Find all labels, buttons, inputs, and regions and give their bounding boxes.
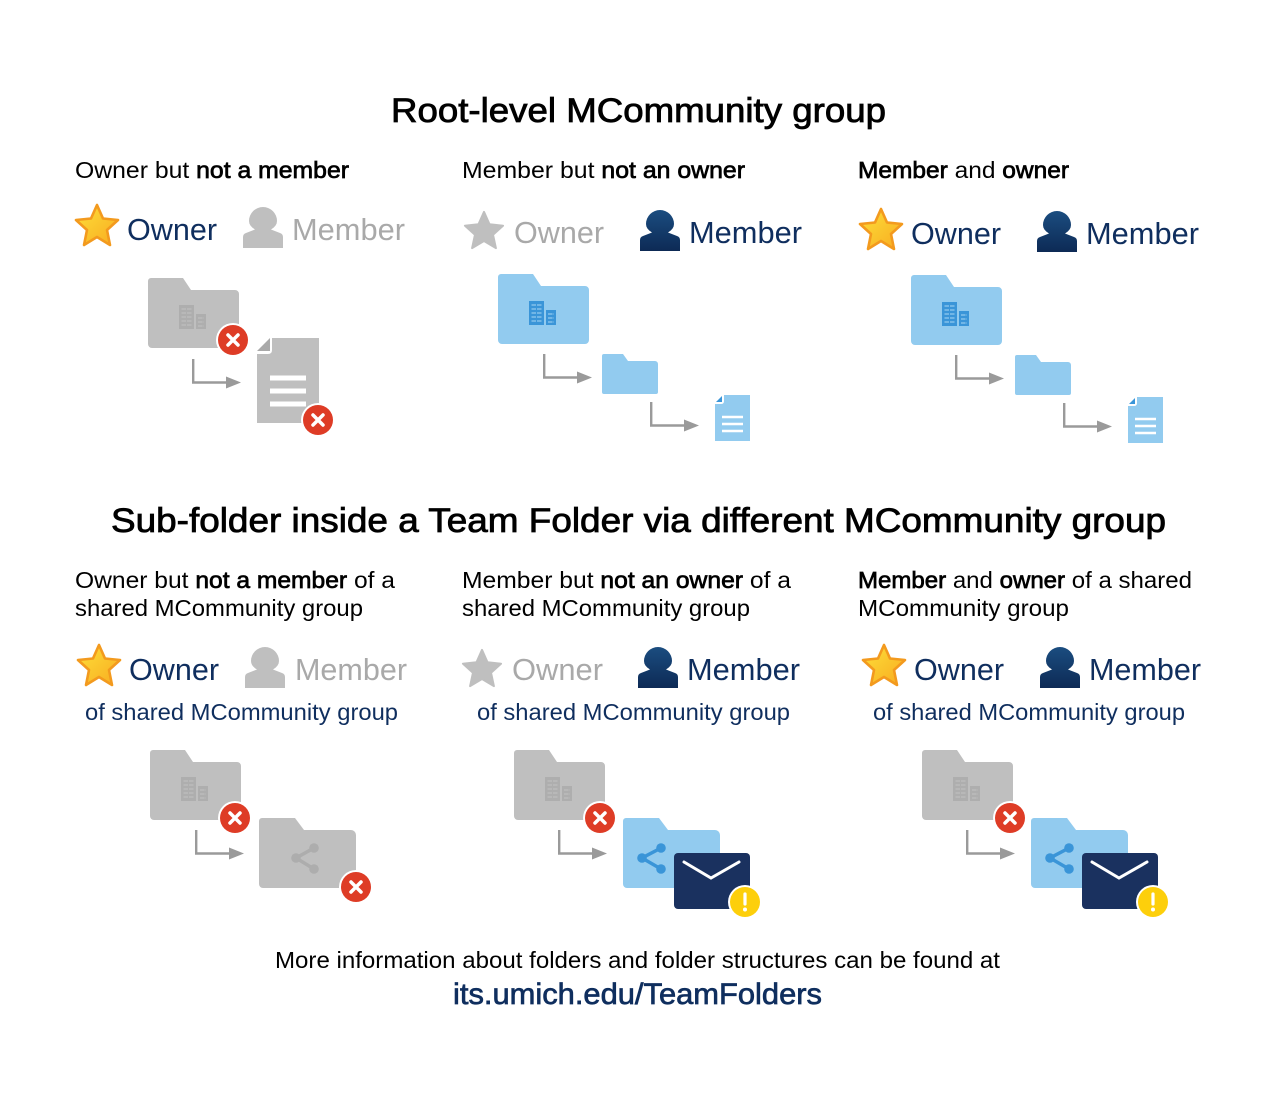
owner label: Owner	[514, 215, 604, 250]
icon: denied badge on folder	[218, 801, 252, 835]
member label: Member	[292, 212, 405, 247]
icon: denied badge on folder	[216, 323, 250, 357]
icon: gray team folder	[150, 750, 241, 820]
group caption: of shared MCommunity group	[85, 699, 398, 725]
title: root-level section: Root-level MCommunity group	[391, 92, 886, 130]
icon: navy person	[1037, 211, 1077, 252]
icon: navy person	[640, 210, 680, 251]
icon: blue shared folder	[1031, 818, 1128, 888]
member label: Member	[1086, 216, 1199, 251]
footer link: its.umich.edu/TeamFolders	[453, 978, 822, 1011]
arrow	[559, 830, 607, 860]
heading: Owner but not a member of a	[75, 567, 395, 593]
panel: owner but not a member (root)	[75, 157, 405, 437]
heading: Member but not an owner	[462, 157, 745, 183]
heading: Member and owner	[858, 157, 1069, 183]
icon: navy person	[1040, 647, 1080, 688]
owner label: Owner	[911, 216, 1001, 251]
icon: blue sub-folder	[602, 354, 658, 394]
icon: denied badge on folder	[583, 801, 617, 835]
icon: gray team folder	[514, 750, 605, 820]
icon: gold star	[860, 209, 902, 249]
icon: blue document	[1128, 397, 1163, 443]
icon: denied badge on shared folder	[339, 870, 373, 904]
icon: gray person	[245, 647, 285, 688]
icon: gray person	[243, 207, 283, 248]
footer note: More information about folders and folder structures can be found at	[275, 947, 1001, 973]
heading: Member but not an owner of a	[462, 567, 791, 593]
heading: shared MCommunity group	[462, 595, 750, 621]
icon: warning badge	[1136, 885, 1170, 919]
panel: member but not an owner (shared)	[462, 567, 800, 919]
icon: blue team folder	[911, 275, 1002, 345]
heading	[858, 567, 1192, 621]
owner label: Owner	[129, 652, 219, 687]
arrow	[956, 355, 1004, 384]
heading: MCommunity group	[858, 595, 1069, 621]
icon: navy envelope	[674, 853, 750, 909]
group caption: of shared MCommunity group	[873, 699, 1185, 725]
icon: gray shared folder	[259, 818, 356, 888]
icon: denied badge on folder	[993, 801, 1027, 835]
member label: Member	[689, 215, 802, 250]
arrow	[967, 830, 1015, 860]
icon: blue sub-folder	[1015, 355, 1071, 395]
panel: member and owner (root)	[858, 157, 1199, 443]
icon: gold star	[78, 645, 120, 685]
panel: member but not an owner (root)	[462, 157, 802, 441]
icon: denied badge on document	[301, 403, 335, 437]
icon: blue shared folder	[623, 818, 720, 888]
arrow	[196, 830, 244, 860]
icon: gray star	[465, 212, 503, 248]
icon: gray team folder	[148, 278, 239, 348]
icon: navy envelope	[1082, 853, 1158, 909]
arrow	[193, 359, 241, 388]
heading: Member and owner of a shared	[858, 567, 1192, 593]
icon: gray star	[463, 650, 501, 686]
member label: Member	[687, 652, 800, 687]
heading: Owner but not a member	[75, 157, 349, 183]
panel: member and owner (shared)	[858, 567, 1201, 919]
panel: owner but not a member (shared)	[75, 567, 407, 904]
icon: gray team folder	[922, 750, 1013, 820]
group caption: of shared MCommunity group	[477, 699, 790, 725]
icon: gold star	[863, 645, 905, 685]
icon: blue document	[715, 395, 750, 441]
arrow	[651, 402, 699, 432]
arrow	[544, 354, 592, 384]
heading: shared MCommunity group	[75, 595, 363, 621]
member label: Member	[295, 652, 407, 687]
heading	[75, 567, 395, 621]
arrow	[1064, 403, 1112, 432]
icon: navy person	[638, 647, 678, 688]
owner label: Owner	[512, 652, 603, 687]
icon: warning badge	[728, 885, 762, 919]
heading	[462, 567, 791, 621]
owner label: Owner	[127, 212, 217, 247]
icon: blue team folder	[498, 274, 589, 344]
icon: gray document	[257, 338, 319, 423]
member label: Member	[1089, 652, 1201, 687]
icon: gold star	[76, 205, 118, 245]
owner label: Owner	[914, 652, 1004, 687]
title: sub-folder section: Sub-folder inside a Team Folder via different MCommunity group	[111, 502, 1166, 540]
